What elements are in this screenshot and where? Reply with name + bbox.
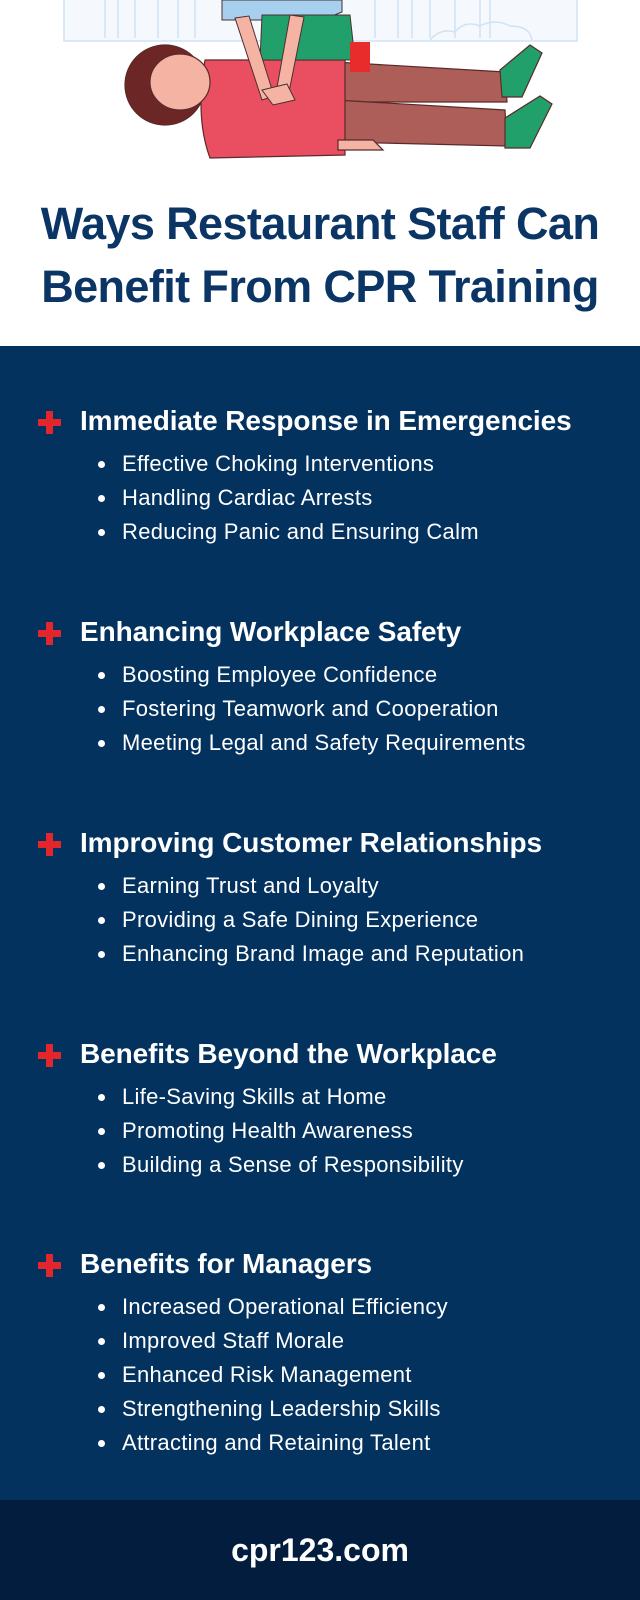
main panel: Boosting Employee Confidence bbox=[122, 662, 437, 687]
main panel: Enhancing Brand Image and Reputation bbox=[122, 941, 524, 966]
main panel: Earning Trust and Loyalty bbox=[122, 873, 379, 898]
main panel: Attracting and Retaining Talent bbox=[122, 1430, 431, 1455]
main panel: Increased Operational Efficiency bbox=[122, 1294, 448, 1319]
illustration: CPR scene bbox=[63, 0, 578, 159]
section 2 bbox=[38, 616, 526, 755]
main panel: Enhanced Risk Management bbox=[122, 1362, 412, 1387]
main panel: Building a Sense of Responsibility bbox=[122, 1152, 464, 1177]
main panel: Effective Choking Interventions bbox=[122, 451, 434, 476]
main panel: Reducing Panic and Ensuring Calm bbox=[122, 519, 479, 544]
section 1 bbox=[38, 405, 572, 544]
background buildings bbox=[64, 0, 577, 41]
main panel: Fostering Teamwork and Cooperation bbox=[122, 696, 499, 721]
main panel: Enhancing Workplace Safety bbox=[80, 616, 461, 647]
rescuer bbox=[222, 0, 370, 105]
patient bbox=[125, 45, 552, 158]
section 3 bbox=[38, 827, 542, 966]
main panel: Promoting Health Awareness bbox=[122, 1118, 413, 1143]
main panel: Immediate Response in Emergencies bbox=[80, 405, 572, 436]
main panel: Handling Cardiac Arrests bbox=[122, 485, 373, 510]
main panel: Life-Saving Skills at Home bbox=[122, 1084, 387, 1109]
main panel: Benefits for Managers bbox=[80, 1248, 372, 1279]
footer bbox=[0, 1500, 640, 1600]
section 4 bbox=[38, 1038, 497, 1177]
main panel: Improved Staff Morale bbox=[122, 1328, 344, 1353]
main panel: Meeting Legal and Safety Requirements bbox=[122, 730, 526, 755]
main panel: Strengthening Leadership Skills bbox=[122, 1396, 441, 1421]
section 5 bbox=[38, 1248, 448, 1455]
title bbox=[40, 198, 599, 312]
main panel: Benefits Beyond the Workplace bbox=[80, 1038, 497, 1069]
main panel: Providing a Safe Dining Experience bbox=[122, 907, 478, 932]
main panel bbox=[0, 346, 640, 1500]
main panel: Improving Customer Relationships bbox=[80, 827, 542, 858]
footer: cpr123.com bbox=[231, 1532, 409, 1568]
title: Ways Restaurant Staff Can bbox=[41, 198, 599, 249]
title: Benefit From CPR Training bbox=[41, 261, 599, 312]
